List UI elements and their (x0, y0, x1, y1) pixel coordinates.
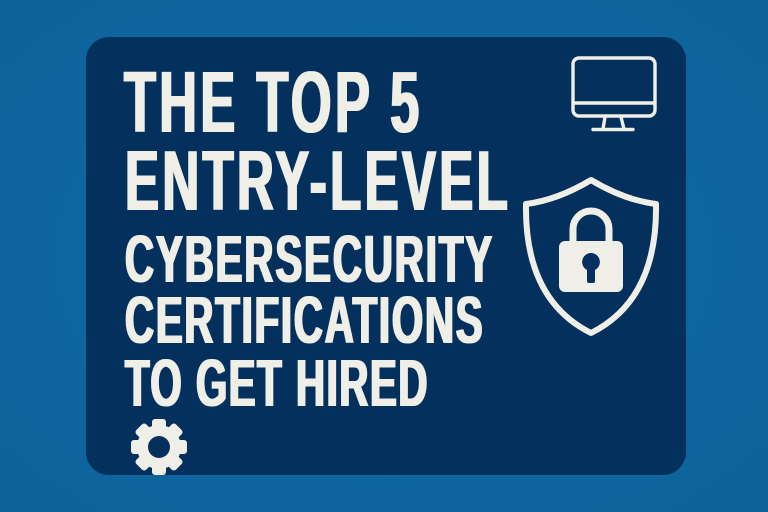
keyhole (582, 253, 600, 283)
padlock shackle (573, 211, 609, 244)
title line 3: CYBERSECURITY (125, 221, 492, 297)
padlock body (559, 241, 623, 292)
icon: gear (131, 419, 187, 475)
title line 1: THE TOP 5 (124, 54, 419, 151)
title line 4: CERTIFICATIONS (125, 282, 483, 358)
title line 5: TO GET HIRED (125, 345, 427, 421)
shield outline (526, 180, 656, 333)
panel: main navy card (86, 37, 686, 475)
icon: shield with padlock (526, 180, 656, 333)
icon: computer monitor (573, 58, 655, 130)
title line 2: ENTRY-LEVEL (125, 134, 508, 228)
title (124, 54, 508, 421)
